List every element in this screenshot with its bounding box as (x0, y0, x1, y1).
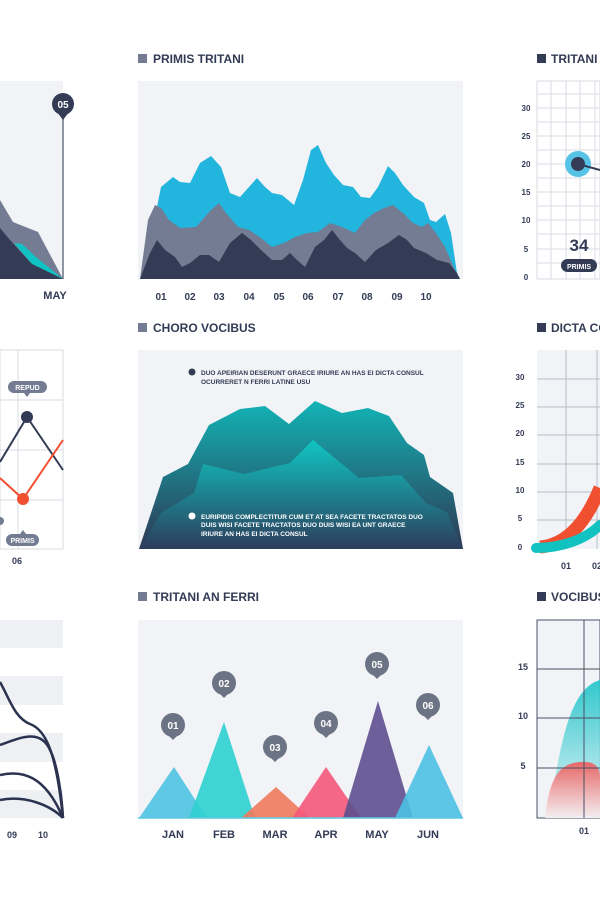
x labels: 02 (184, 292, 196, 303)
chart: right curves: 5 (518, 514, 523, 523)
chart: right curves (516, 350, 600, 571)
chart: right grid dot: 10 (522, 216, 531, 225)
chart: right bell curves: 10 (518, 711, 528, 721)
chart: stacked wave area (138, 81, 463, 303)
chart: right curves: 10 (516, 486, 525, 495)
chart: triangle peaks: 05 (371, 660, 383, 671)
legend text bottom: DUIS WISI FACETE TRACTATOS DUO DUIS WISI EA UNT GRAECE (201, 522, 406, 529)
chart: triangle peaks (138, 620, 463, 841)
chart: left curves stripes: 09 (7, 830, 17, 840)
pill REPUD (8, 381, 47, 397)
x labels: 07 (332, 292, 344, 303)
month labels: APR (314, 829, 338, 841)
chart: right bell curves: 01 (579, 826, 589, 836)
chart: left line grid: 06 (12, 556, 22, 566)
legend text bottom: IRIURE AN HAS EI DICTA CONSUL (201, 531, 308, 538)
chart: right bell curves: 15 (518, 662, 528, 672)
chart: triangle peaks: 04 (320, 719, 332, 730)
legend text top: OCURRERET N FERRI LATINE USU (201, 379, 311, 386)
chart: right bell curves: 5 (520, 761, 526, 771)
chart: right grid dot: 30 (522, 104, 531, 113)
chart: triangle peaks: 03 (269, 743, 281, 754)
title: TRITANI AN FERRI: TRITANI AN FERRI (153, 590, 259, 604)
x labels: 08 (361, 292, 373, 303)
label MAY: MAY (43, 290, 67, 302)
chart: right curves: 20 (516, 429, 525, 438)
x labels: 09 (391, 292, 403, 303)
chart: right curves: 30 (516, 373, 525, 382)
x labels: 04 (243, 292, 255, 303)
chart: right bell curves (518, 620, 600, 836)
legend text bottom (188, 512, 423, 538)
chart: right curves: 15 (516, 458, 525, 467)
chart: right curves: 01 (561, 561, 571, 571)
pill PRIMIS: PRIMIS (567, 264, 591, 271)
month labels: MAY (365, 829, 389, 841)
month labels: JUN (417, 829, 439, 841)
x labels: 05 (273, 292, 285, 303)
pill REPUD: REPUD (15, 385, 40, 392)
x labels: 10 (420, 292, 432, 303)
chart: right curves: 0 (518, 543, 523, 552)
chart: left curves stripes: 10 (38, 830, 48, 840)
pin 05: 05 (57, 100, 69, 111)
chart: right grid dot (522, 81, 600, 282)
chart: right grid dot: 20 (522, 160, 531, 169)
chart: right curves: 25 (516, 401, 525, 410)
value 34: 34 (570, 236, 589, 255)
pill PRIMIS (6, 530, 39, 546)
legend text top (188, 368, 424, 386)
chart: left line grid (0, 350, 63, 566)
title: CHORO VOCIBUS: CHORO VOCIBUS (153, 321, 256, 335)
x labels: 03 (213, 292, 225, 303)
pins (161, 652, 440, 762)
marker (565, 151, 600, 177)
x labels (155, 292, 432, 303)
panel: left row1 area (0, 81, 74, 302)
chart: right grid dot: 5 (524, 245, 529, 254)
chart: triangle peaks: 01 (167, 721, 179, 732)
month labels: FEB (213, 829, 235, 841)
chart: right grid dot: 0 (524, 273, 529, 282)
chart: right grid dot: 15 (522, 188, 531, 197)
legend text top: DUO APEIRIAN DESERUNT GRAECE IRIURE AN HAS EI DICTA CONSUL (201, 370, 424, 377)
title: PRIMIS TRITANI: PRIMIS TRITANI (153, 52, 244, 66)
x labels: 06 (302, 292, 314, 303)
chart: triangle peaks: 06 (422, 701, 434, 712)
pill PRIMIS: PRIMIS (10, 538, 35, 545)
chart: mountain area (138, 350, 463, 549)
chart: triangle peaks: 02 (218, 679, 230, 690)
month labels: JAN (162, 829, 184, 841)
chart: left curves stripes (0, 620, 63, 840)
chart: right grid dot: 25 (522, 132, 531, 141)
month labels: MAR (262, 829, 288, 841)
pin 05 (52, 93, 74, 120)
month labels (162, 829, 439, 841)
pill PRIMIS (561, 259, 597, 272)
x labels: 01 (155, 292, 167, 303)
legend text bottom: EURIPIDIS COMPLECTITUR CUM ET AT SEA FACETE TRACTATOS DUO (201, 514, 423, 521)
